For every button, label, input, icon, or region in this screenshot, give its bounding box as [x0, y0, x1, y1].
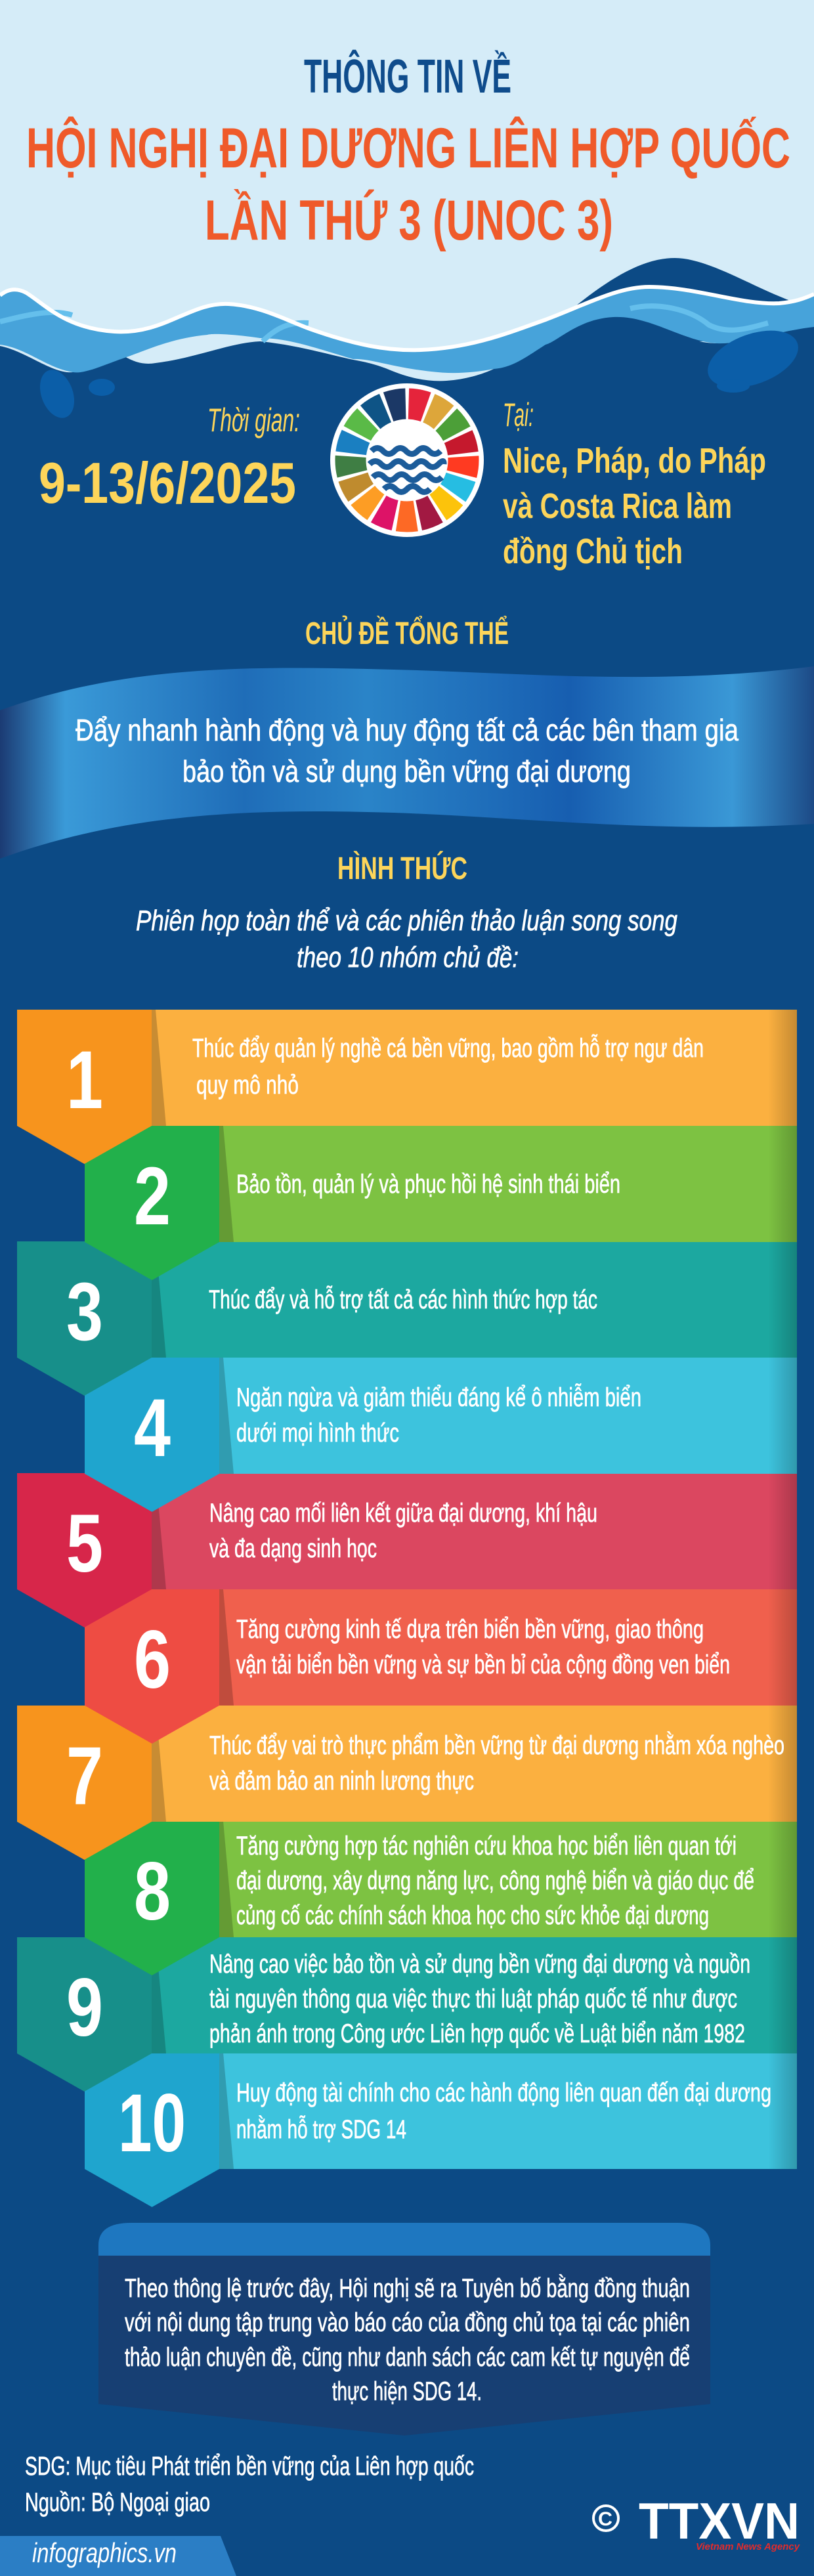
item 3: Thúc đẩy và hỗ trợ tất cả các hình thức hợp tác	[209, 1285, 597, 1314]
item 5	[17, 1473, 797, 1627]
location block: và Costa Rica làm	[503, 486, 732, 526]
item 8	[85, 1821, 797, 1975]
footnote and source: Nguồn: Bộ Ngoại giao	[25, 2488, 210, 2517]
item 10: nhằm hỗ trợ SDG 14	[236, 2114, 406, 2144]
item 2	[85, 1126, 797, 1280]
time block: Thời gian:	[207, 402, 300, 439]
item 4: 4	[134, 1383, 171, 1474]
list: 10 thematic groups	[17, 1010, 797, 2207]
location block: Tại:	[503, 397, 534, 433]
footer: infographics.vn: infographics.vn	[32, 2537, 177, 2568]
icon: SDG wheel	[330, 383, 484, 537]
item 7: và đảm bảo an ninh lương thực	[209, 1767, 474, 1795]
title: LẦN THỨ 3 (UNOC 3)	[205, 189, 613, 252]
item 4: Ngăn ngừa và giảm thiểu đáng kể ô nhiễm biển	[236, 1383, 641, 1412]
item 2: Bảo tồn, quản lý và phục hồi hệ sinh thái biển	[236, 1170, 620, 1199]
heading: Hình thức: HÌNH THỨC	[337, 850, 467, 886]
item 5: 5	[66, 1498, 103, 1589]
background top light	[0, 0, 814, 407]
ribbon: theme: bảo tồn và sử dụng bền vững đại dương	[182, 754, 631, 788]
footnote and source: SDG: Mục tiêu Phát triển bền vững của Liên hợp quốc	[25, 2452, 474, 2481]
item 5: Nâng cao mối liên kết giữa đại dương, khí hậu	[209, 1499, 597, 1528]
item 10: 10	[118, 2078, 186, 2169]
item 5: và đa dạng sinh học	[209, 1534, 377, 1563]
item 10	[85, 2053, 797, 2207]
item 1	[17, 1010, 797, 1164]
text: format description	[136, 905, 677, 974]
item 3	[17, 1241, 797, 1396]
callout: declaration box	[98, 2223, 710, 2436]
text: format description: Phiên họp toàn thể và các phiên thảo luận song song	[136, 905, 677, 937]
item 1: 1	[66, 1035, 103, 1126]
time block	[39, 402, 300, 515]
item 4: dưới mọi hình thức	[236, 1419, 399, 1448]
item 6: 6	[134, 1614, 171, 1706]
logo: TTXVN: C	[598, 2508, 612, 2530]
text: format description: theo 10 nhóm chủ đề:	[297, 941, 519, 974]
item 9	[17, 1937, 797, 2092]
footer: infographics.vn	[0, 2536, 236, 2576]
item 8: 8	[134, 1846, 171, 1937]
item 4	[85, 1358, 797, 1512]
logo: TTXVN: TTXVN	[639, 2492, 800, 2550]
heading: Chủ đề tổng thể: CHỦ ĐỀ TỔNG THỂ	[305, 615, 509, 651]
item 9: 9	[66, 1962, 103, 2053]
logo: TTXVN: Vietnam News Agency	[696, 2541, 800, 2552]
callout: declaration box: thực hiện SDG 14.	[332, 2377, 482, 2406]
location block: đồng Chủ tịch	[503, 532, 683, 571]
title	[26, 117, 790, 252]
item 6	[85, 1589, 797, 1744]
item 1: quy mô nhỏ	[196, 1071, 299, 1100]
item 2: 2	[134, 1151, 171, 1242]
item 7: 7	[66, 1730, 103, 1822]
item 7	[17, 1706, 797, 1860]
location block	[503, 397, 766, 571]
heading: Thông tin về: THÔNG TIN VỀ	[304, 50, 511, 103]
item 3: 3	[66, 1266, 103, 1358]
wave decoration	[0, 258, 814, 423]
time block: 9-13/6/2025	[39, 450, 296, 515]
footnote and source	[25, 2452, 474, 2517]
ribbon: theme	[0, 666, 814, 859]
